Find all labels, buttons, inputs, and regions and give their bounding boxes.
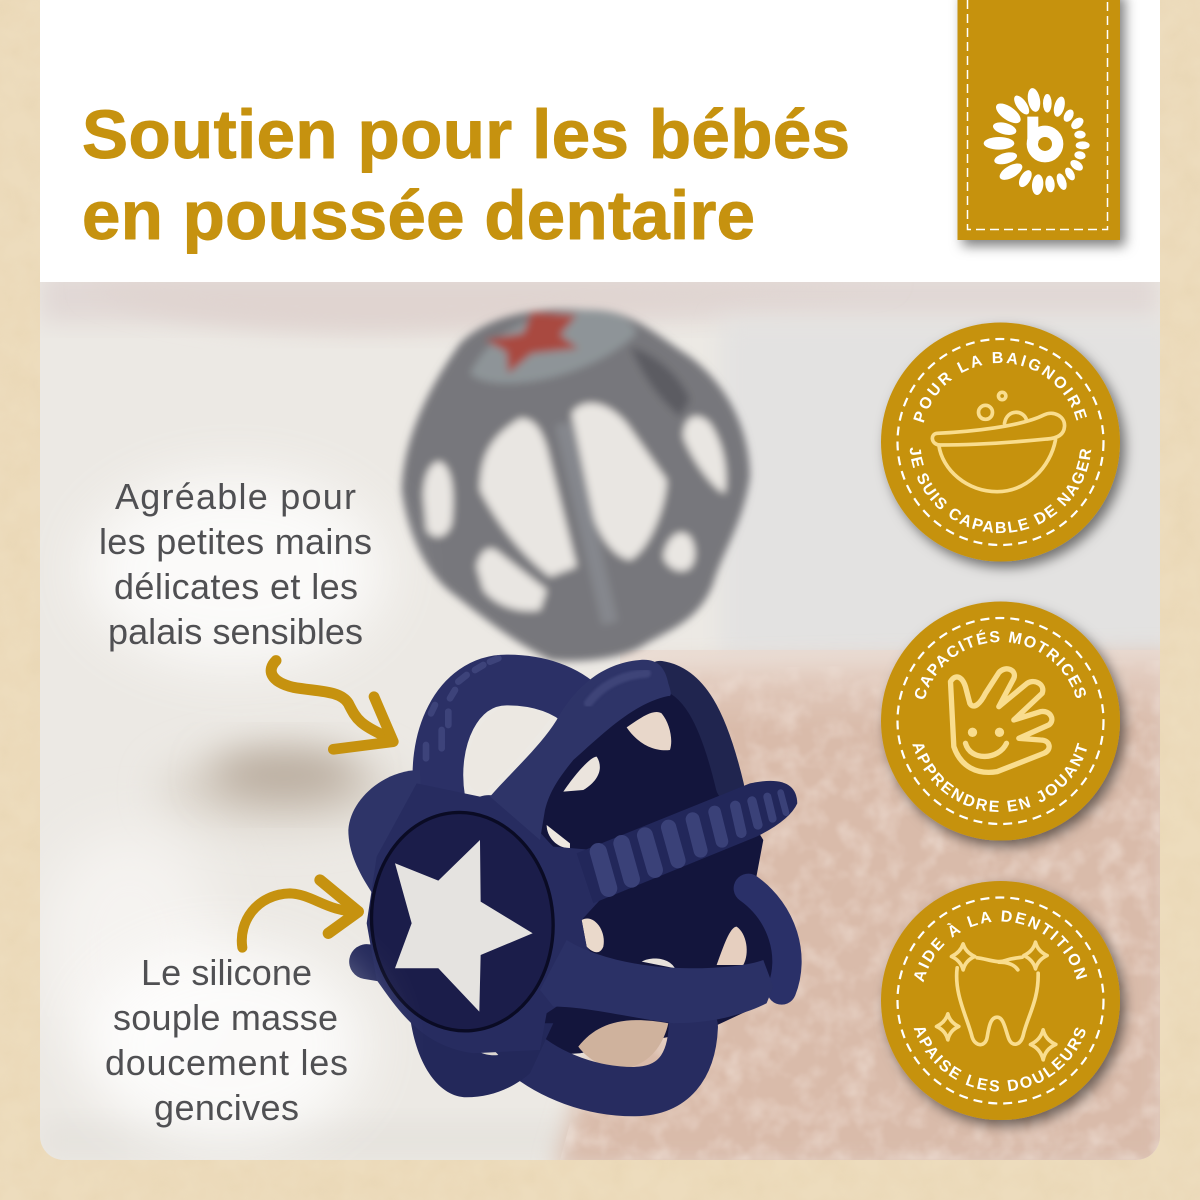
hole E xyxy=(477,549,547,611)
callout text: silicone xyxy=(105,952,348,1128)
left lobe xyxy=(348,770,414,892)
arrow to ridged ring xyxy=(271,661,393,749)
hole D xyxy=(683,416,726,493)
badge: dentition xyxy=(878,878,1134,1134)
left knob xyxy=(367,962,387,965)
brand tag with logo xyxy=(958,0,1120,240)
title: Soutien pour les bébés xyxy=(82,96,850,173)
callout text: petites mains: les petites mains xyxy=(99,521,372,562)
badge: baignoire: JE SUIS CAPABLE DE NAGER xyxy=(910,447,1092,534)
toy openings xyxy=(547,712,747,1068)
icon: bathtub xyxy=(932,392,1065,492)
icon: sunflower b logo xyxy=(984,87,1090,195)
badge: capacités motrices xyxy=(878,599,1134,855)
lower front arm xyxy=(556,952,770,1023)
callout text: silicone: doucement les xyxy=(105,1042,348,1083)
pink towel xyxy=(555,650,1170,1170)
top-left ridged ring xyxy=(438,680,583,800)
hole F xyxy=(663,533,695,571)
callout text: petites mains: délicates et les xyxy=(114,566,358,607)
hole B xyxy=(572,403,667,560)
arm upper xyxy=(490,660,671,840)
callout text: petites mains: palais sensibles xyxy=(108,611,363,652)
header panel xyxy=(40,0,1160,282)
callout text: silicone: souple masse xyxy=(113,997,338,1038)
callout text: petites mains xyxy=(99,476,372,652)
callout text: petites mains: Agréable pour xyxy=(115,476,356,517)
icon: tooth with sparkles xyxy=(936,942,1056,1060)
photo backdrop xyxy=(40,270,1180,1160)
badge: dentition: AIDE À LA DENTITION xyxy=(914,910,1088,982)
badge: capacités motrices: CAPACITÉS MOTRICES xyxy=(914,630,1086,699)
badge: dentition: APAISE LES DOULEURS xyxy=(914,1028,1086,1092)
icon: smiling hand xyxy=(950,669,1052,772)
arrow to disc xyxy=(242,880,358,948)
grey silicone ball (blurred, background) xyxy=(402,309,750,661)
toy hub xyxy=(367,783,600,1053)
hole A xyxy=(480,418,577,577)
callout text: silicone: Le silicone xyxy=(141,952,312,993)
ridged arm xyxy=(577,781,797,903)
lower-left lobe xyxy=(410,1017,553,1097)
badge: baignoire xyxy=(878,320,1134,576)
title xyxy=(82,96,850,254)
white star xyxy=(395,840,533,1012)
text glow lower xyxy=(85,945,365,1145)
navy teether toy xyxy=(348,658,797,1097)
callout text: silicone: gencives xyxy=(154,1087,299,1128)
toy interior shadow xyxy=(541,694,772,1054)
star disc xyxy=(370,810,555,1032)
title: en poussée dentaire xyxy=(82,177,755,254)
photo panel xyxy=(40,270,1180,1170)
badge: baignoire: POUR LA BAIGNOIRE xyxy=(913,352,1087,423)
bottom arm xyxy=(520,1027,693,1092)
text glow upper xyxy=(85,475,385,665)
badge: capacités motrices: APPRENDRE EN JOUANT xyxy=(912,742,1087,812)
hole C xyxy=(423,462,453,537)
